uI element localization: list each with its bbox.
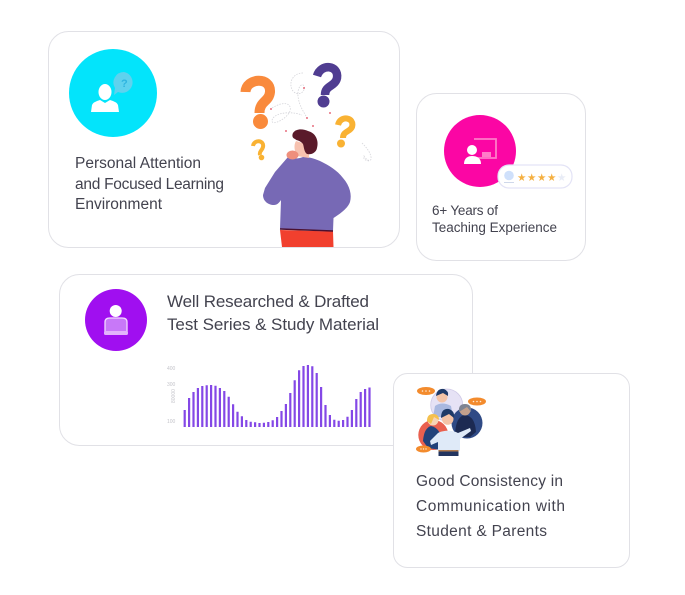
text: communication: Good Consistency in [416,473,563,490]
bar chart [167,365,370,427]
question mark: orange [246,81,270,129]
icon: person with question bubble [69,49,157,137]
text: teaching experience: Teaching Experience [432,220,557,235]
person [263,129,351,247]
question mark: yellow left [253,141,264,160]
rating pill: ★ [517,172,527,184]
text: personal attention: and Focused Learning [75,176,224,193]
panel: teaching experience [416,94,586,260]
question mark: yellow right [337,118,352,148]
heading: test series: Test Series & Study Material [167,315,379,334]
text: teaching experience [432,203,557,235]
question mark: purple [317,67,337,108]
panel: test series [60,274,472,446]
bar chart: 80000 [171,389,177,403]
panel: communication [394,374,630,568]
text: personal attention: Personal Attention [75,155,201,172]
heading: test series [167,292,379,334]
dashed doodles [272,73,371,161]
icon: student at laptop [85,289,147,351]
text: communication: Student & Parents [416,523,547,540]
icon: person with question bubble: ? [121,78,128,90]
text: communication: Communication with [416,498,565,515]
illustration: thinking person with question marks [246,67,371,247]
text: personal attention: Environment [75,196,163,213]
bar chart: 300 [167,382,176,388]
heading: test series: Well Researched & Drafted [167,292,369,311]
rating pill: ★ [557,172,567,184]
rating pill: ★ [547,172,557,184]
text: teaching experience: 6+ Years of [432,203,498,218]
bar chart: 400 [167,366,176,372]
speech bubbles [416,387,486,452]
text: personal attention [75,155,224,213]
panel: personal attention [48,32,400,248]
icon: teacher at board [444,115,516,187]
illustration: group of people [416,387,486,456]
bar chart: 100 [167,419,176,425]
text: communication [416,473,565,540]
rating pill: ★ [537,172,547,184]
rating pill: ★ [527,172,537,184]
rating pill [498,165,572,188]
